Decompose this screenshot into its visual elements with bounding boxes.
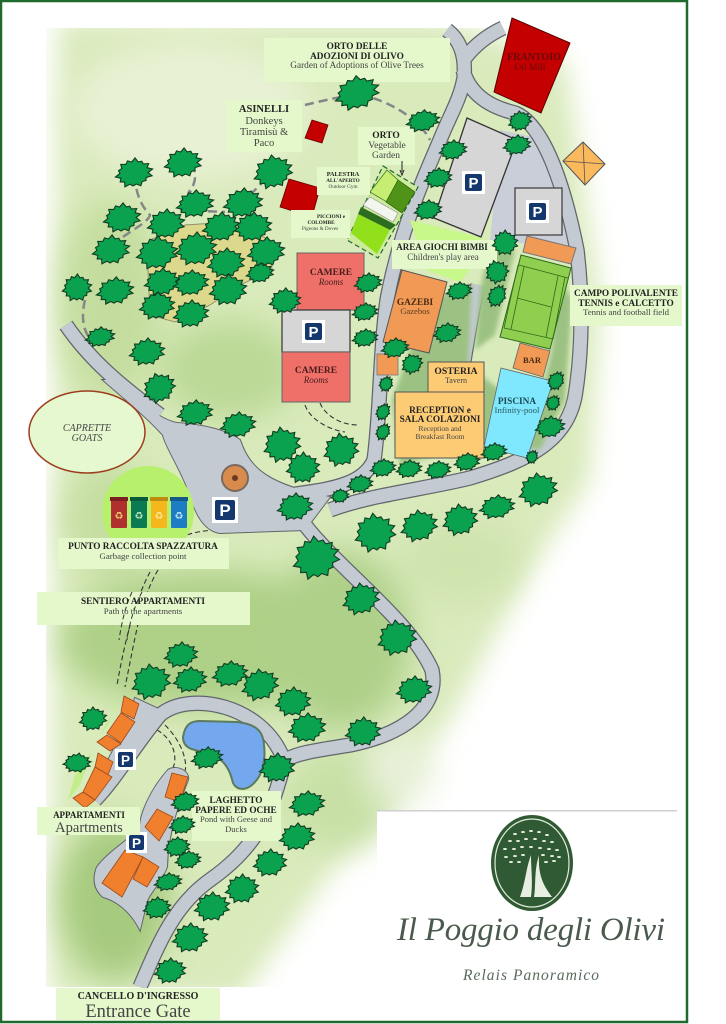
parking sign: apartments lower: P: [132, 836, 141, 851]
label: Punto raccolta spazzatura: PUNTO RACCOLTA SPAZZATURA: [68, 542, 218, 552]
garbage collection circle with bins: ♻: [175, 511, 184, 522]
parking sign: upper right car park: [526, 200, 549, 223]
car park: upper right: [515, 188, 562, 235]
logo panel: [377, 810, 680, 1011]
label: Cancello d'ingresso: [56, 988, 220, 1022]
label: Orto delle Adozioni: ADOZIONI DI OLIVO: [310, 52, 404, 62]
label: Palestra: [317, 167, 370, 195]
apartment green patches: [68, 696, 118, 800]
label: Palestra: PALESTRA: [327, 171, 360, 178]
tennis and football field: [500, 236, 576, 349]
label: Appartamenti: Apartments: [55, 820, 123, 836]
trees: olive orchard: [60, 145, 303, 368]
car park: upper large: [434, 118, 517, 237]
label: Laghetto: PAPERE ED OCHE: [195, 806, 277, 816]
arrow: Orto to garden: [400, 161, 404, 175]
label: Orto: Garden: [372, 151, 400, 161]
label: Piccioni e Colombe: [291, 210, 350, 238]
label: Orto: Vegetable: [368, 141, 406, 151]
label: Orto: [358, 127, 415, 165]
building: Gazebi: [383, 270, 447, 353]
label: Laghetto: LAGHETTO: [209, 796, 263, 806]
label: Laghetto: Pond with Geese and: [200, 814, 273, 824]
goats enclosure: GOATS: [72, 433, 102, 444]
building: Bar: [513, 343, 550, 377]
label: Sentiero appartamenti: Path to the apartments: [104, 606, 183, 616]
label: Punto raccolta spazzatura: [58, 538, 229, 569]
goats enclosure: [29, 391, 145, 473]
pond: [183, 721, 265, 789]
watercolor map background: [50, 20, 600, 1000]
label: Orto: ORTO: [372, 131, 400, 141]
label: Cancello d'ingresso: CANCELLO D'INGRESSO: [78, 991, 199, 1002]
apartment buildings: [73, 696, 188, 897]
garbage collection circle with bins: ♻: [155, 511, 164, 522]
building: Frantoio oil mill: Oil Mill: [515, 63, 546, 73]
parking sign: large car park: [462, 171, 485, 194]
label: Asinelli: Paco: [254, 138, 274, 149]
label: Palestra: ALL'APERTO: [326, 178, 360, 184]
building: Bar: BAR: [523, 355, 542, 365]
trees: lower slope: [126, 468, 562, 749]
building: Frantoio oil mill: [494, 18, 570, 113]
car park: central: [282, 310, 350, 352]
building: Frantoio oil mill: FRANTOIO: [507, 52, 561, 63]
building: Camere upper: Rooms: [318, 277, 344, 287]
label: Laghetto: Ducks: [225, 824, 247, 834]
label: Orto delle Adozioni: Garden of Adoptions of Olive Trees: [290, 60, 424, 71]
logo oval emblem: [491, 815, 573, 911]
orange gazebo kite: [563, 142, 605, 185]
parking sign: apartments upper: [115, 749, 136, 770]
parking sign: plaza: P: [219, 501, 231, 520]
label: Orto delle Adozioni: [264, 38, 450, 82]
swimming pool: Infinity-pool: [495, 405, 540, 415]
vegetable garden plots: [347, 166, 418, 258]
label: Punto raccolta spazzatura: Garbage collection point: [100, 551, 187, 561]
building: Reception: [395, 392, 484, 458]
building: Gazebi: Gazebos: [400, 306, 430, 316]
label: Palestra: Outdoor Gym: [329, 184, 357, 190]
parking sign: apartments upper: P: [121, 753, 130, 768]
building: Gazebi: GAZEBI: [397, 298, 433, 308]
red building: [280, 179, 320, 217]
parking sign: central car park: P: [308, 324, 319, 341]
orchard yellow patches: [148, 222, 272, 322]
black dashed paths: [117, 403, 358, 771]
building: Camere upper: [297, 253, 364, 310]
label: Asinelli: [226, 100, 302, 152]
label: Orto delle Adozioni: ORTO DELLE: [327, 42, 387, 52]
building: Camere lower: [282, 352, 350, 402]
donkeys shed: [305, 120, 328, 143]
building: Osteria: Tavern: [445, 376, 467, 385]
label: Campo polivalente: [570, 285, 682, 326]
garbage collection circle with bins: [102, 466, 194, 558]
parking sign: central car park: [302, 320, 325, 343]
resort grounds green: [392, 245, 572, 465]
trees: apartments and entrance: [62, 704, 327, 986]
label: Piccioni e Colombe: PICCIONI e: [317, 214, 346, 220]
building: Osteria: OSTERIA: [434, 366, 478, 377]
label: Asinelli: Tiramisù &: [240, 127, 288, 138]
label: Appartamenti: [37, 807, 140, 836]
roads network: [66, 28, 581, 987]
label: Asinelli: ASINELLI: [239, 104, 289, 115]
building: Camere lower: CAMERE: [295, 366, 337, 376]
label: Piccioni e Colombe: COLOMBE: [307, 220, 335, 226]
trees: central grounds: [137, 70, 567, 523]
building: Reception: SALA COLAZIONI: [400, 415, 481, 425]
dashed footpaths: [83, 94, 430, 340]
small orange building: [377, 354, 398, 375]
label: Campo polivalente: Tennis and football field: [583, 307, 670, 317]
swimming pool: [484, 368, 551, 458]
label: Cancello d'ingresso: Entrance Gate: [85, 1002, 191, 1022]
garbage collection circle with bins: ♻: [115, 511, 124, 522]
label: Sentiero appartamenti: SENTIERO APPARTAMENTI: [81, 597, 205, 607]
building: Reception: RECEPTION e: [409, 406, 471, 416]
swimming pool: PISCINA: [498, 397, 536, 407]
logo tagline: Relais Panoramico: [462, 967, 599, 984]
dashes over Sentiero label: [119, 592, 142, 640]
building: Reception: Breakfast Room: [416, 432, 465, 441]
parking sign: large car park: P: [468, 175, 479, 192]
label: Piccioni e Colombe: Pigeons & Doves: [302, 226, 338, 232]
logo wordmark: Il Poggio degli Olivi: [396, 912, 665, 948]
label: Appartamenti: APPARTAMENTI: [53, 810, 125, 820]
garbage collection circle with bins: ♻: [135, 511, 144, 522]
building: Camere upper: CAMERE: [310, 268, 352, 278]
parking sign: upper right car park: P: [532, 204, 543, 221]
label: Laghetto: [192, 791, 281, 841]
label: Area giochi bimbi: [392, 240, 497, 269]
play area: [410, 220, 482, 282]
building: Reception: Reception and: [418, 424, 462, 433]
parking sign: plaza: [212, 497, 238, 523]
parking sign: apartments lower: [126, 832, 147, 853]
label: Area giochi bimbi: Children's play area: [407, 252, 479, 262]
building: Osteria: [428, 362, 484, 392]
label: Asinelli: Donkeys: [245, 116, 283, 127]
label: Sentiero appartamenti: [37, 592, 250, 625]
well / roundabout: [222, 465, 248, 491]
goats enclosure: CAPRETTE: [63, 423, 111, 434]
label: Campo polivalente: CAMPO POLIVALENTE: [574, 289, 678, 299]
building: Camere lower: Rooms: [303, 375, 329, 385]
label: Area giochi bimbi: AREA GIOCHI BIMBI: [396, 242, 488, 252]
label: Campo polivalente: TENNIS e CALCETTO: [578, 299, 674, 309]
